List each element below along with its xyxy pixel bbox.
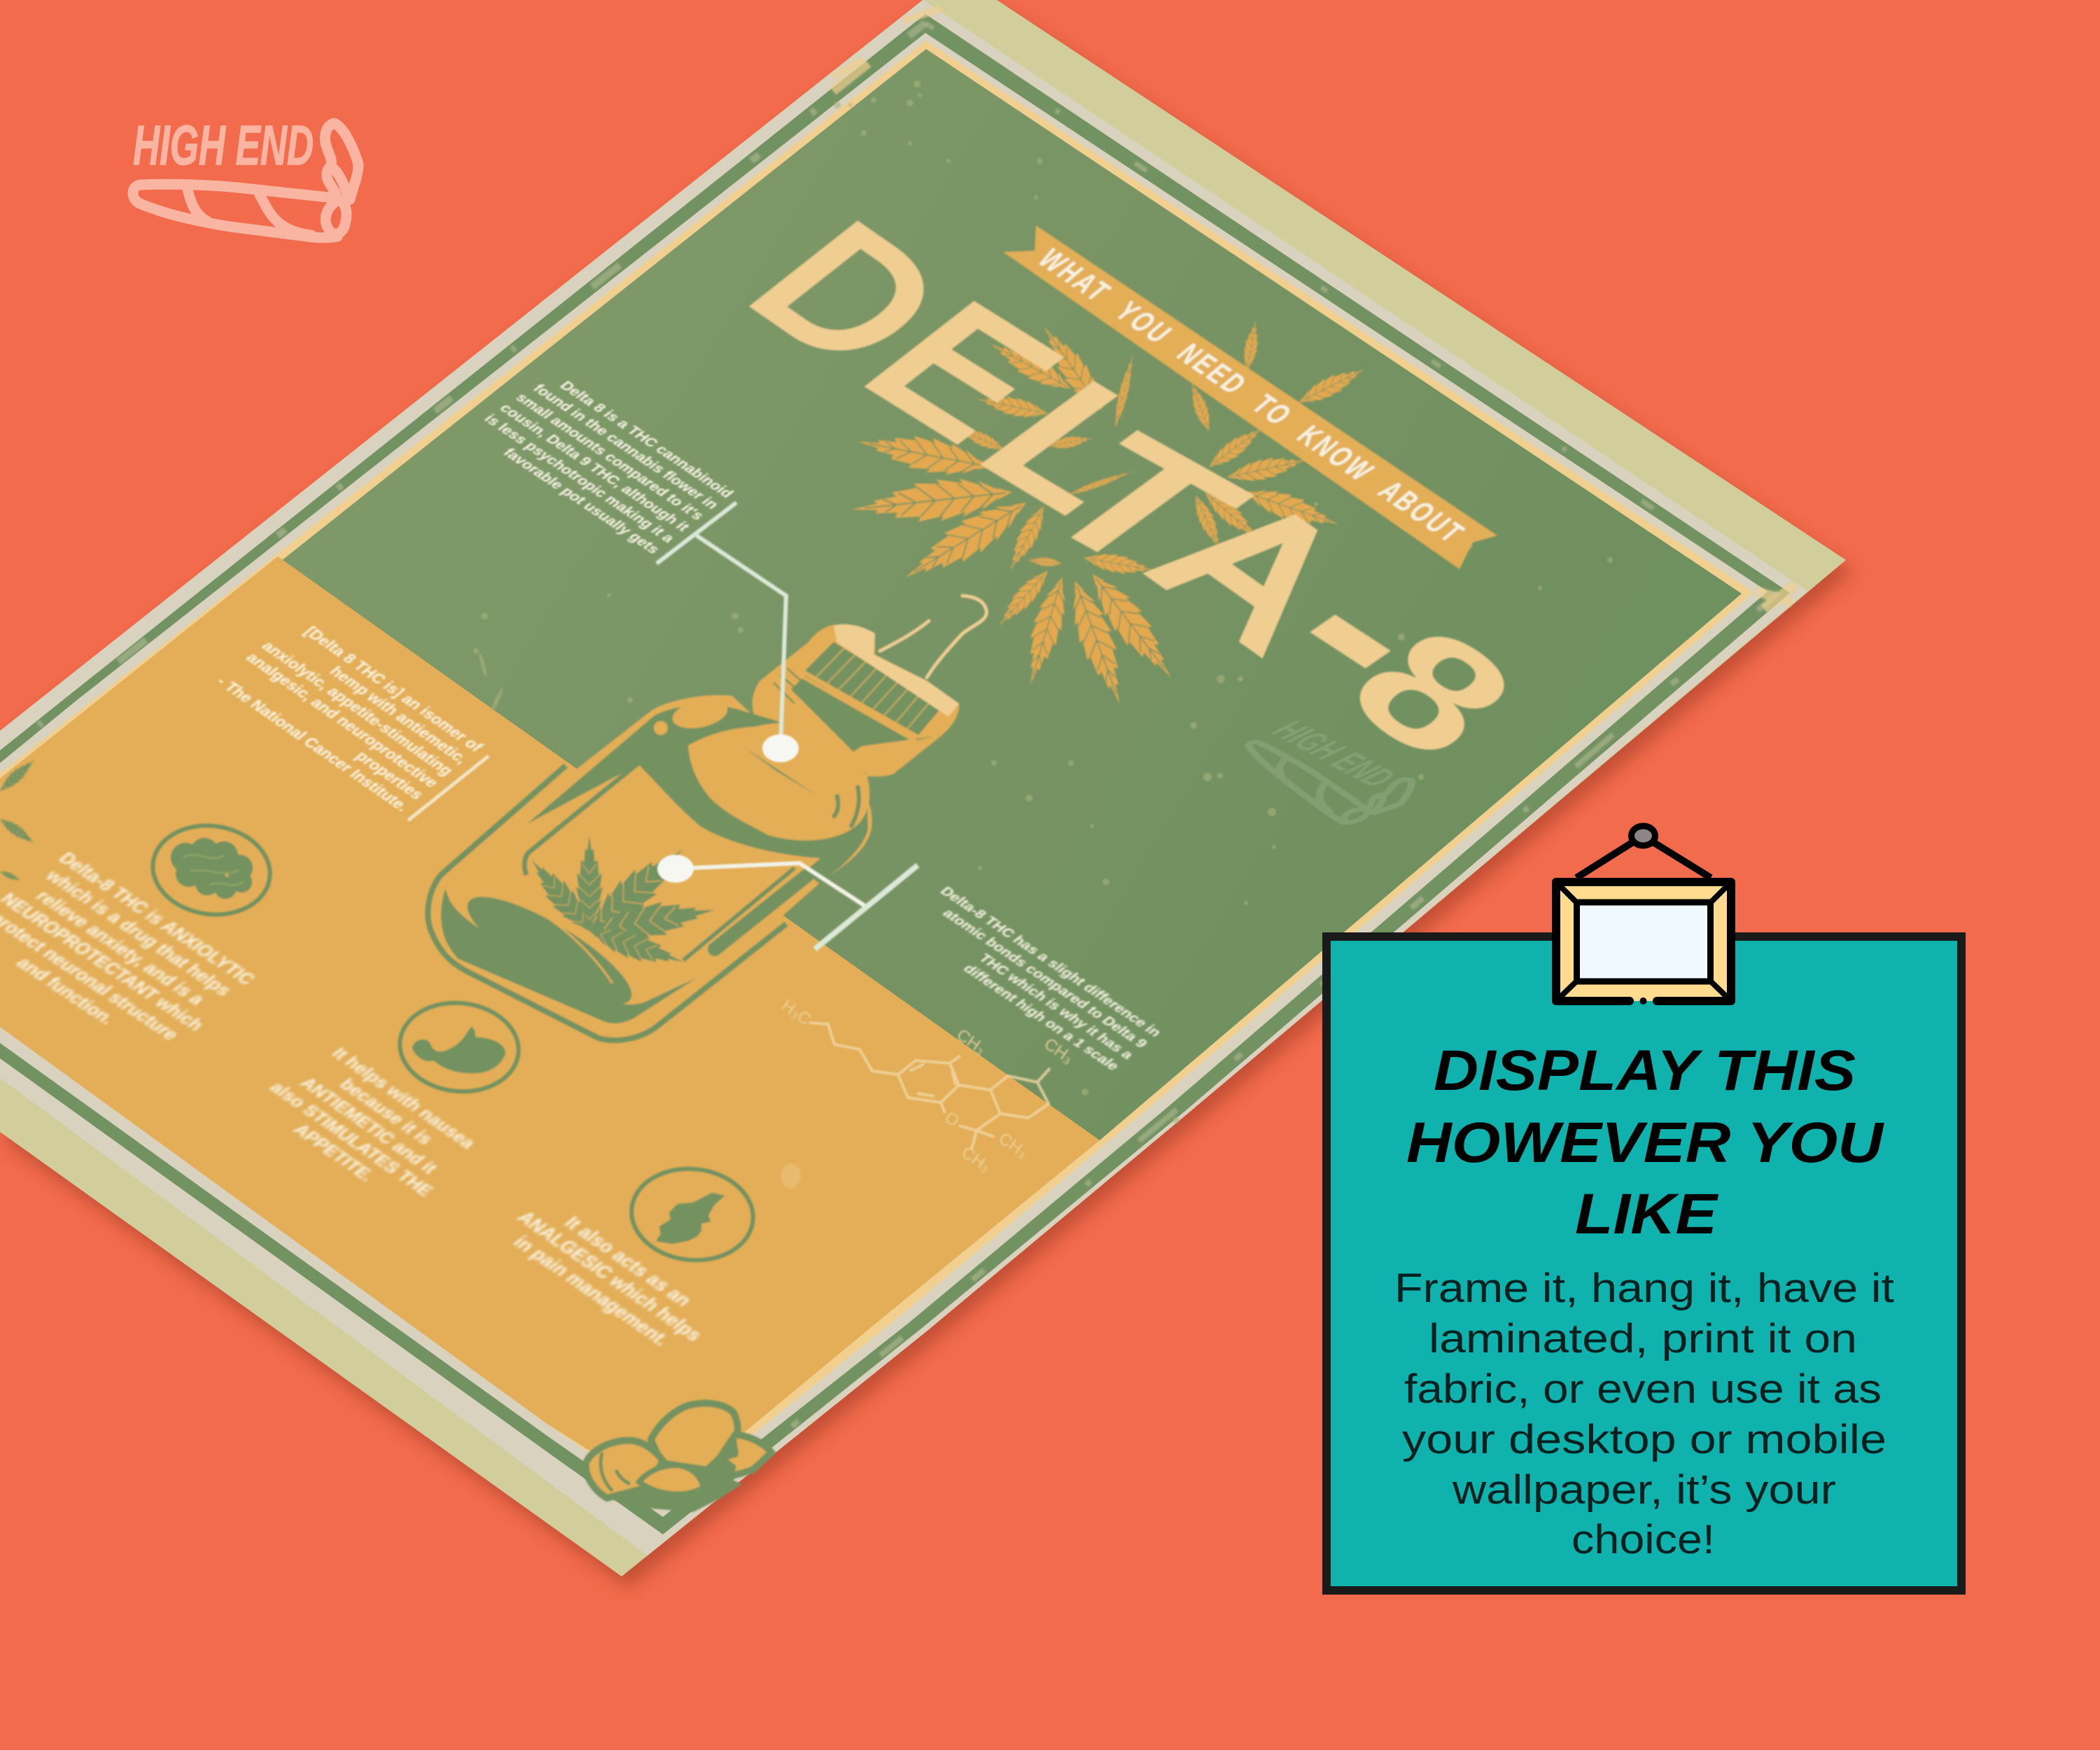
text: institute quote: analgesic, and neuroprotective [242, 650, 442, 790]
callout lines and dots [408, 503, 918, 949]
poster [0, 0, 1846, 1576]
heading [1406, 1039, 1884, 1246]
text: what is Delta-8 [465, 368, 737, 556]
body text: laminated, print it on [1429, 1316, 1857, 1362]
text: institute quote [213, 614, 486, 815]
logo wordmark: HIGH END [133, 114, 314, 176]
icon: brain [147, 818, 276, 922]
text: chemical difference: different high on a 1 scale [960, 962, 1123, 1073]
cap top face [834, 624, 959, 717]
molecule diagram: O [941, 1108, 962, 1131]
panel: green field [278, 49, 1742, 1140]
logo: HIGH END joint [133, 114, 358, 238]
text: what is Delta-8: Delta 8 is a THC cannabinoid [556, 379, 736, 500]
bottle silhouette [426, 624, 959, 1040]
body text: your desktop or mobile [1402, 1417, 1886, 1462]
body text: choice! [1572, 1517, 1715, 1562]
inner label line [524, 763, 638, 875]
ornament: corner buds [586, 1404, 771, 1512]
text: chemical difference: Delta-8 THC has a slight difference in [937, 884, 1165, 1040]
text: analgesic [494, 1192, 726, 1359]
icon: spine [627, 1163, 757, 1266]
frame distress marks [0, 8, 1795, 1522]
text: what is Delta-8: found in the cannabis flower in [529, 382, 722, 512]
side bar [715, 874, 808, 949]
text: chemical difference: THC which is why it has a [975, 951, 1137, 1062]
molecule diagram: CH₃ [995, 1129, 1031, 1162]
lower crescent [441, 889, 696, 1023]
text: what is Delta-8: cousin, Delta 9 THC, although it [496, 401, 692, 534]
bottle neck [791, 676, 934, 752]
text: anxiolytic: Delta-8 THC is ANXIOLYTIC [54, 848, 260, 988]
body text: wallpaper, it’s your [1452, 1467, 1836, 1513]
text: antiemetic: also STIMULATES THE [265, 1079, 437, 1200]
molecule diagram: CH₃ [1041, 1035, 1077, 1068]
banner text: WHAT YOU NEED TO KNOW ABOUT [1030, 244, 1471, 548]
title: DELTA-8 [711, 192, 1555, 790]
watermark logo: HIGH END [1263, 714, 1404, 793]
icon: stomach [396, 997, 523, 1098]
base ellipse [455, 879, 644, 1022]
highlights [654, 695, 730, 735]
text: anxiolytic: and function. [12, 953, 120, 1028]
text: anxiolytic: NEUROPROTECTANT which [0, 889, 209, 1035]
label leaf [521, 835, 718, 975]
text: what is Delta-8: is less psychotropic making it a [480, 412, 678, 545]
title: DELTA-8: - [1213, 523, 1525, 735]
bottle glass and shoulder [527, 705, 868, 883]
dropper highlights [880, 596, 986, 678]
text: antiemetic: ANTIEMETIC and it [296, 1074, 442, 1177]
text: institute quote: hemp with antiemetic, [326, 664, 472, 766]
orange shoulder highlight [688, 723, 869, 841]
teal box [1326, 937, 1961, 1590]
text: antiemetic: because it is [335, 1076, 437, 1148]
molecule diagram: CH₃ [958, 1143, 994, 1176]
text: institute quote: [Delta 8 THC is] an isomer of [301, 624, 486, 755]
icon: hanging picture frame [1556, 826, 1731, 1004]
title: DELTA-8: T [996, 409, 1284, 599]
body text [1394, 1266, 1894, 1562]
text: institute quote: - The National Cancer Institute. [213, 673, 413, 814]
paper shadow [7, 11, 1853, 1588]
corner leaf fragments [0, 755, 39, 883]
molecule diagram [778, 996, 1077, 1176]
text: antiemetic: APPETITE. [289, 1121, 379, 1185]
cannabis leaves [850, 318, 1369, 710]
text: chemical difference: atomic bonds compared to Delta 9 [939, 906, 1151, 1051]
outline on orange field [428, 766, 786, 1040]
paper sheet with frame bands [0, 0, 1846, 1576]
title: DELTA-8: 8 [1310, 595, 1555, 790]
text: anxiolytic [0, 846, 264, 1063]
title: DELTA-8: L [939, 353, 1211, 539]
banner ribbon [1003, 225, 1497, 569]
text: what is Delta-8: small amounts compared to it's [512, 391, 707, 523]
text: anxiolytic: relieve anxiety, and is a [31, 886, 210, 1009]
text: antiemetic: It helps with nausea [328, 1044, 480, 1152]
panel: orange field [0, 556, 1100, 1498]
body text: Frame it, hang it, have it [1394, 1266, 1894, 1311]
paper speckles [473, 80, 1613, 1189]
text: anxiolytic: which is a drug that helps [41, 866, 237, 1000]
heading: LIKE [1575, 1182, 1718, 1246]
text: analgesic: It also acts as an [560, 1212, 697, 1310]
logo icon [133, 123, 358, 238]
molecule diagram: H₃C [778, 996, 814, 1029]
title: DELTA-8: E [826, 272, 1099, 470]
illustration: dropper bottle [426, 596, 986, 1040]
text: institute quote: properties [352, 748, 428, 802]
text: chemical difference [895, 884, 1165, 1073]
text: analgesic: ANALGESIC which helps [512, 1207, 708, 1345]
text: analgesic: in pain management. [509, 1232, 675, 1350]
text: institute quote: anxiolytic, appetite-stimulating [258, 638, 457, 778]
heading: HOWEVER YOU [1406, 1111, 1884, 1175]
body text: fabric, or even use it as [1404, 1366, 1882, 1412]
heading: DISPLAY THIS [1434, 1039, 1856, 1102]
molecule diagram: CH₃ [953, 1026, 989, 1058]
watermark logo [1226, 713, 1431, 830]
title: DELTA-8: D [711, 192, 985, 398]
text: what is Delta-8: favorable pot usually gets [500, 446, 663, 556]
text: antiemetic [248, 1038, 489, 1213]
panel: display callout [1326, 826, 1961, 1590]
cap knurl band [774, 642, 941, 742]
title: DELTA-8: A [1121, 458, 1389, 680]
